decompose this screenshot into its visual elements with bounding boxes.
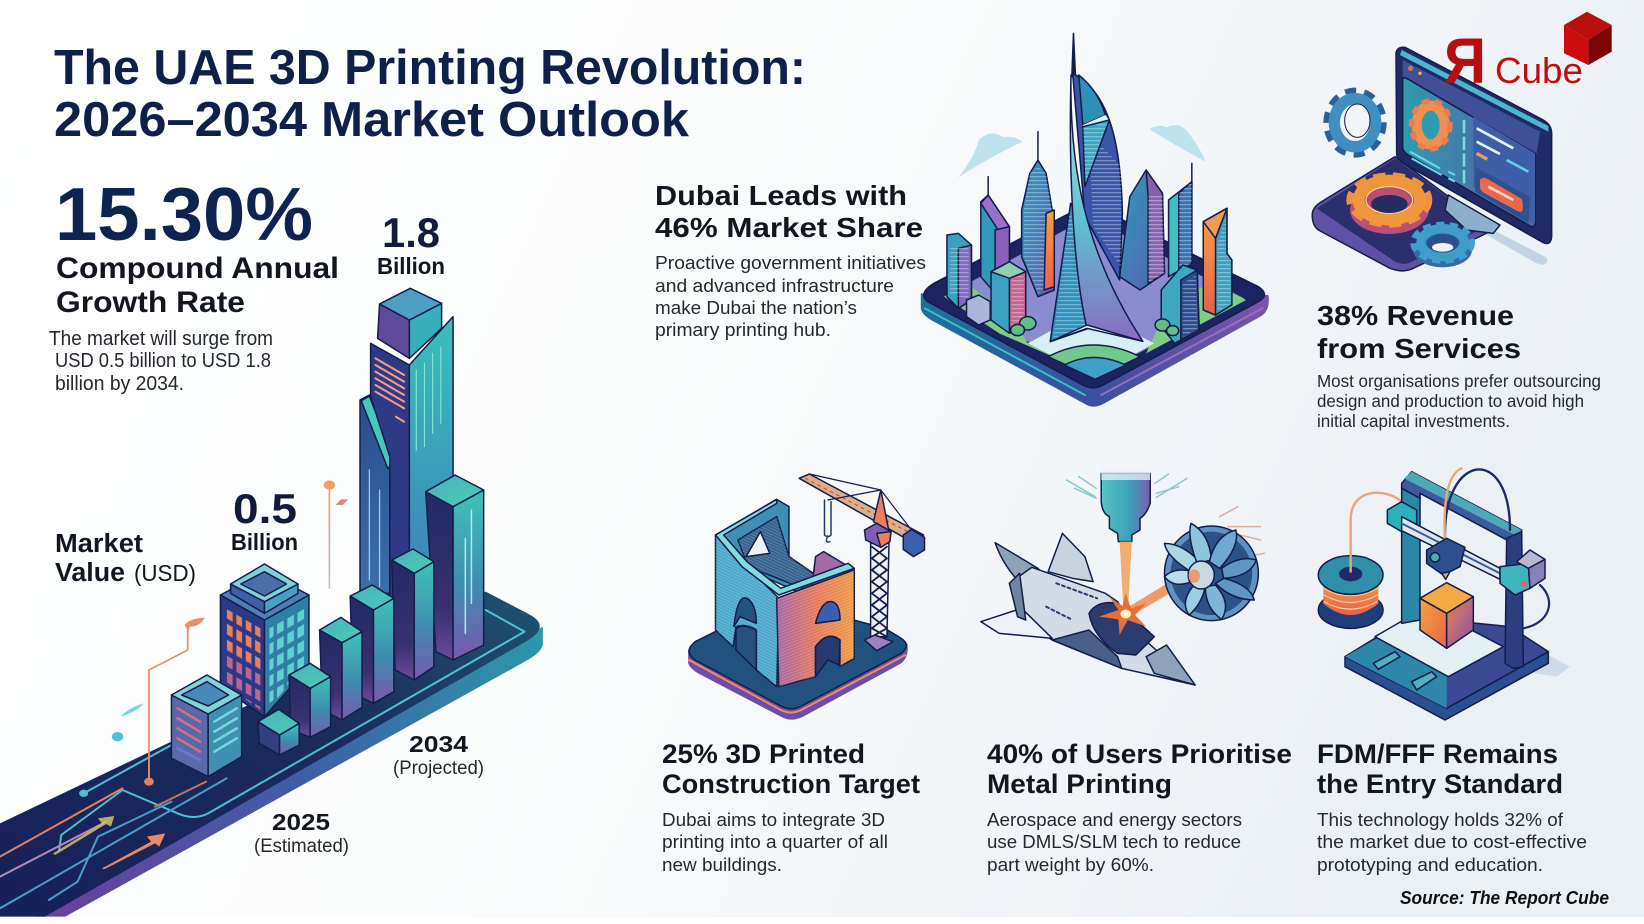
label: 2034 projected: 2034 xyxy=(409,731,468,757)
heading xyxy=(662,739,920,799)
CAGR description: billion by 2034. xyxy=(55,373,184,395)
logo cube xyxy=(1564,12,1612,65)
title: The UAE 3D Printing Revolution: xyxy=(54,41,806,95)
heading: Metal Printing xyxy=(987,769,1172,799)
body: Most organisations prefer outsourcing xyxy=(1317,371,1601,391)
shadow of stand xyxy=(1487,230,1547,265)
label: 0.5 billion: Billion xyxy=(231,529,298,555)
tray xyxy=(1312,157,1493,271)
icon: laser printing jet and turbine xyxy=(981,467,1264,685)
panel: Dubai market share text xyxy=(655,180,926,340)
panel: metal printing text xyxy=(987,739,1292,875)
icon: FDM 3D printer with spool xyxy=(1318,468,1570,720)
heading: 40% of Users Prioritise xyxy=(987,739,1292,769)
heading xyxy=(1317,739,1563,799)
body: This technology holds 32% of xyxy=(1317,809,1564,830)
label: 1.8 billion xyxy=(377,209,445,279)
rear bar xyxy=(426,475,484,660)
body xyxy=(662,809,888,875)
CAGR description: USD 0.5 billion to USD 1.8 xyxy=(55,350,271,372)
icon: monitor with gears xyxy=(1312,47,1552,271)
heading xyxy=(987,739,1292,799)
logo wordmark: Я xyxy=(1444,25,1486,97)
left towers xyxy=(947,132,1054,336)
gear: small blue xyxy=(1413,225,1472,267)
title xyxy=(54,41,806,147)
logo: RCube xyxy=(1444,12,1612,97)
monitor xyxy=(1396,47,1552,244)
decorative pins and dots xyxy=(79,480,348,797)
body: primary printing hub. xyxy=(655,319,831,340)
label: 2034 projected: (Projected) xyxy=(393,758,484,779)
right towers xyxy=(1155,208,1232,343)
building left wall xyxy=(716,535,779,687)
bar 2 xyxy=(392,549,434,680)
tall tower 1.8 billion xyxy=(360,288,453,600)
heading xyxy=(1317,300,1521,364)
bar 5 xyxy=(289,663,331,737)
turbine xyxy=(1164,523,1258,621)
label: 2025 estimated xyxy=(254,809,349,857)
left and top frame xyxy=(1387,472,1523,668)
label: 0.5 billion xyxy=(231,485,298,555)
right carriage block xyxy=(1500,550,1549,628)
print head xyxy=(1427,468,1510,579)
body: design and production to avoid high xyxy=(1317,391,1584,411)
bar 3 xyxy=(350,585,394,703)
label: 2025 estimated: 2025 xyxy=(272,809,330,835)
icon: Dubai skyline on isometric base xyxy=(921,33,1269,407)
nozzle xyxy=(1067,467,1187,542)
body: use DMLS/SLM tech to reduce xyxy=(987,831,1241,852)
body xyxy=(1317,371,1601,431)
heading: 25% 3D Printed xyxy=(662,739,865,769)
body: initial capital investments. xyxy=(1317,411,1510,431)
jet xyxy=(981,533,1195,685)
label: 1.8 billion: 1.8 xyxy=(382,209,440,256)
CAGR heading: Compound Annual xyxy=(56,252,339,285)
body xyxy=(1317,809,1587,875)
heading: FDM/FFF Remains xyxy=(1317,739,1558,769)
label: market value: Value xyxy=(55,559,125,587)
body: Proactive government initiatives xyxy=(655,252,926,273)
heading: Dubai Leads with xyxy=(655,180,907,211)
body xyxy=(655,252,926,340)
heading: the Entry Standard xyxy=(1317,769,1563,799)
central tower xyxy=(1050,33,1143,342)
heading: 38% Revenue xyxy=(1317,300,1514,331)
arrows on platform xyxy=(53,816,165,869)
label: 0.5 billion: 0.5 xyxy=(233,485,297,532)
bar 4 xyxy=(320,617,362,720)
bed xyxy=(1375,607,1503,677)
mid building 0.5 billion xyxy=(220,564,309,717)
panel: services revenue text xyxy=(1317,300,1601,431)
panel: construction target text xyxy=(662,739,920,875)
printed cube xyxy=(1420,583,1473,648)
source note: Source: The Report Cube xyxy=(1400,888,1609,908)
small building 2025 xyxy=(171,675,242,777)
heading: 46% Market Share xyxy=(655,212,923,243)
body: printing into a quarter of all xyxy=(662,831,888,852)
gear: blue tilted xyxy=(1329,93,1381,152)
small cube bar xyxy=(258,709,299,755)
building orange wall xyxy=(716,499,854,687)
body: part weight by 60%. xyxy=(987,854,1154,875)
body: make Dubai the nation’s xyxy=(655,297,857,318)
panel: FDM text xyxy=(1317,739,1587,875)
label: 1.8 billion: Billion xyxy=(377,253,445,279)
CAGR description: The market will surge from xyxy=(49,328,273,350)
orange connector pin xyxy=(144,618,205,786)
body: and advanced infrastructure xyxy=(655,275,894,296)
logo: RCube: Cube xyxy=(1495,50,1583,91)
spool xyxy=(1318,556,1383,628)
body: Dubai aims to integrate 3D xyxy=(662,809,885,830)
CAGR heading: Growth Rate xyxy=(56,286,245,319)
label: market value: Market xyxy=(55,530,144,558)
stand xyxy=(1445,195,1500,233)
label: market value: (USD) xyxy=(134,560,196,586)
printer base xyxy=(1345,617,1570,720)
clouds xyxy=(958,125,1206,177)
CAGR description xyxy=(49,328,273,395)
back towers xyxy=(981,163,1192,300)
heading: Construction Target xyxy=(662,769,920,799)
illustration: market growth chart with isometric buildings xyxy=(0,288,543,917)
CAGR stat block xyxy=(49,172,339,395)
label: 2025 estimated: (Estimated) xyxy=(254,836,349,857)
building back wall xyxy=(716,499,854,600)
circuit lines on platform xyxy=(0,610,524,908)
body: new buildings. xyxy=(662,854,782,875)
filament xyxy=(1351,493,1402,572)
gear: orange xyxy=(1350,176,1429,234)
heading: from Services xyxy=(1317,333,1521,364)
crane jib and cab xyxy=(799,474,924,557)
title: 2026–2034 Market Outlook xyxy=(54,93,690,147)
tray top xyxy=(1317,158,1487,264)
base xyxy=(921,203,1269,407)
laser beams xyxy=(1120,507,1264,617)
body xyxy=(987,809,1242,875)
CAGR heading xyxy=(56,252,339,319)
label: 2034 projected xyxy=(393,731,484,779)
heading xyxy=(655,180,923,243)
label: market value xyxy=(55,530,196,587)
body: Aerospace and energy sectors xyxy=(987,809,1242,830)
platform xyxy=(0,592,543,917)
base xyxy=(688,600,908,720)
body: prototyping and education. xyxy=(1317,854,1543,875)
icon: 3D printed building with crane xyxy=(688,474,924,720)
CAGR number: 15.30% xyxy=(55,172,313,256)
body: the market due to cost-effective xyxy=(1317,831,1587,852)
crane mast xyxy=(864,543,893,651)
